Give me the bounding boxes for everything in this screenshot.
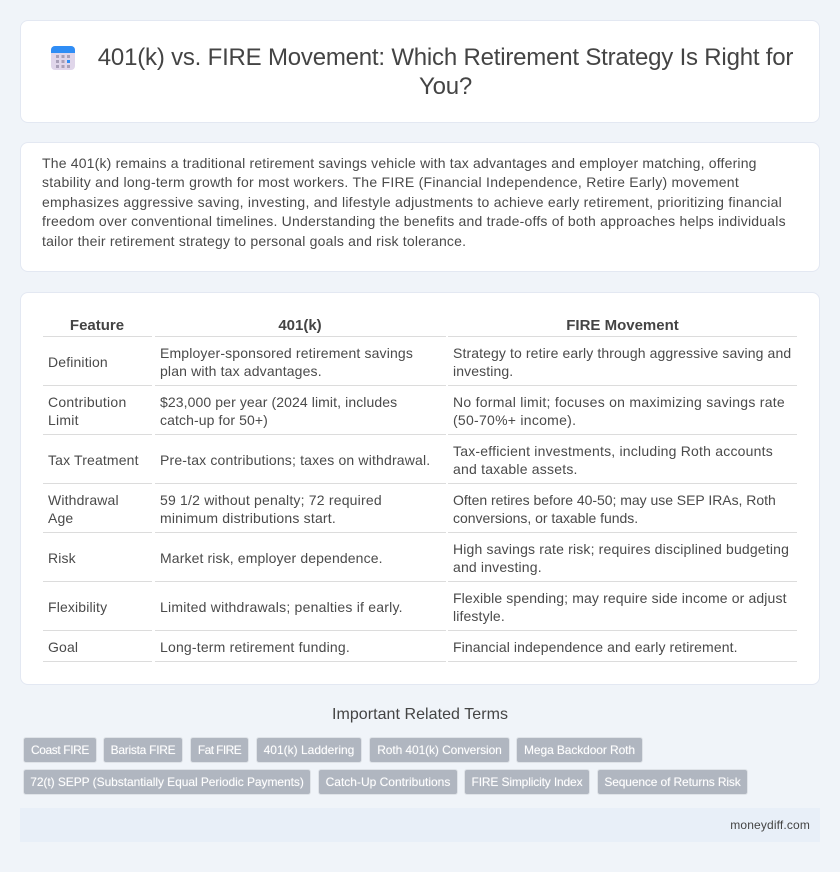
row: definition: Employer-sponsored retirement savings [160,345,413,361]
row: definition: plan with tax advantages. [160,363,322,379]
intro text: The 401(k) remains a traditional retirement savings vehicle with tax advantages and employer matching, offering [42,155,757,171]
related terms tags: Catch-Up Contributions [326,775,450,789]
related terms tags: Mega Backdoor Roth [524,743,635,757]
table header: Feature [70,317,124,334]
row: tax treatment: and taxable assets. [453,461,578,477]
row: contribution limit [43,394,797,435]
row: flexibility: Limited withdrawals; penalties if early. [160,599,403,615]
row: withdrawal age: conversions, or taxable funds. [453,510,638,526]
table header: FIRE Movement [566,317,679,334]
related terms heading: Important Related Terms [332,706,508,723]
row: definition: investing. [453,363,513,379]
row: risk [43,541,797,582]
intro text: stability and long-term growth for most workers. The FIRE (Financial Independence, Retire Early) movement [42,174,739,190]
row: withdrawal age: Withdrawal [48,492,119,508]
related terms tags: Fat FIRE [198,743,241,757]
row: flexibility: Flexible spending; may require side income or adjust [453,590,787,606]
row: flexibility: Flexibility [48,599,107,615]
intro text: freedom over conventional timelines. Understanding the benefits and trade-offs of both approaches helps individuals [42,213,786,229]
title: 401(k) vs. FIRE Movement: Which Retirement Strategy Is Right for [98,44,793,71]
row: definition [43,345,797,386]
row: goal [43,639,797,662]
title: You? [419,73,472,100]
footer source: moneydiff.com [730,818,810,832]
row: risk: and investing. [453,559,542,575]
row: tax treatment: Tax Treatment [48,452,139,468]
row: risk: Risk [48,550,76,566]
table header: 401(k) [278,317,322,334]
intro text: emphasizes aggressive saving, investing, and lifestyle adjustments to achieve early retirement, prioritizing financial [42,194,782,210]
related terms tags: 401(k) Laddering [264,743,354,757]
row: tax treatment: Tax-efficient investments, including Roth accounts [453,443,773,459]
icon: calendar [51,46,75,70]
row: flexibility [43,590,797,631]
row: risk: Market risk, employer dependence. [160,550,383,566]
intro text: tailor their retirement strategy to personal goals and risk tolerance. [42,233,466,249]
related terms tags [23,737,748,795]
related terms tags: Coast FIRE [31,743,89,757]
title [98,44,793,100]
row: goal: Financial independence and early retirement. [453,639,738,655]
row: risk: High savings rate risk; requires disciplined budgeting [453,541,789,557]
related terms tags: Barista FIRE [111,743,175,757]
related terms tags: Sequence of Returns Risk [604,775,741,789]
table header [43,317,797,337]
related terms tags: 72(t) SEPP (Substantially Equal Periodic Payments) [30,775,304,789]
intro panel [20,142,820,272]
header panel [20,20,820,123]
row: definition: Definition [48,354,108,370]
row: goal: Long-term retirement funding. [160,639,350,655]
related terms tags: FIRE Simplicity Index [472,775,582,789]
row: withdrawal age: minimum distributions start. [160,510,336,526]
row: goal: Goal [48,639,78,655]
row: contribution limit: $23,000 per year (2024 limit, includes [160,394,397,410]
related terms tags: Roth 401(k) Conversion [377,743,502,757]
comparison table panel [20,292,820,685]
row: tax treatment: Pre-tax contributions; taxes on withdrawal. [160,452,430,468]
row: withdrawal age: Age [48,510,73,526]
row: tax treatment [43,443,797,484]
row: contribution limit: (50-70%+ income). [453,412,576,428]
row: withdrawal age: Often retires before 40-50; may use SEP IRAs, Roth [453,492,776,508]
row: withdrawal age [43,492,797,533]
row: flexibility: lifestyle. [453,608,505,624]
row: contribution limit: catch-up for 50+) [160,412,268,428]
footer bar [20,808,820,842]
row: definition: Strategy to retire early through aggressive saving and [453,345,791,361]
row: contribution limit: No formal limit; focuses on maximizing savings rate [453,394,785,410]
row: contribution limit: Contribution [48,394,126,410]
intro text [42,155,786,249]
row: withdrawal age: 59 1/2 without penalty; 72 required [160,492,382,508]
row: contribution limit: Limit [48,412,79,428]
